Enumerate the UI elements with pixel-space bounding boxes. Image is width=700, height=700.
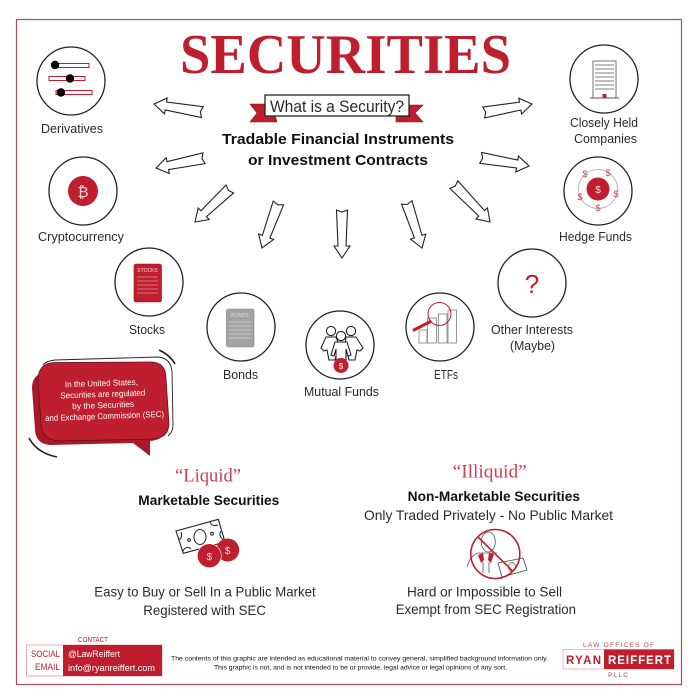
item: ETFs <box>406 293 474 382</box>
icon: cash and coins: $ <box>225 546 231 557</box>
footer: law firm logo: LAW OFFICES OF <box>583 642 654 649</box>
footer: contact box: info@ryanreiffert.com <box>68 663 155 673</box>
footer: disclaimer <box>171 656 548 672</box>
item: bonds: BONDS <box>231 313 250 319</box>
item: cryptocurrency: ₿ <box>77 184 89 201</box>
footer: contact box: EMAIL <box>35 662 60 672</box>
subtitle <box>222 131 454 169</box>
item: other interests <box>491 249 573 353</box>
item: derivatives: Derivatives <box>41 121 103 136</box>
subheading: non-marketable securities: Only Traded Privately - No Public Market <box>364 507 613 523</box>
footer: law firm logo: REIFFERT <box>608 655 671 667</box>
arrow to stocks <box>189 183 235 228</box>
footer: contact box <box>26 635 162 676</box>
text: liquid description <box>94 584 316 618</box>
item: hedge funds: Hedge Funds <box>559 229 632 244</box>
subheading: marketable securities: Marketable Securities <box>138 493 279 508</box>
item: bonds: Bonds <box>223 367 258 382</box>
item: stocks: Stocks <box>129 322 165 337</box>
heading: Illiquid: “Illiquid” <box>453 462 527 483</box>
item: derivatives <box>37 47 105 136</box>
callout: SEC regulation: In the United States, <box>65 377 138 389</box>
item: cryptocurrency <box>38 157 124 244</box>
item: stocks <box>115 248 183 337</box>
callout: SEC regulation: Securities are regulated <box>60 388 146 400</box>
callout: SEC regulation: by the Securities <box>72 399 134 411</box>
item: other interests: ? <box>525 269 539 299</box>
arrow to other interests <box>448 179 496 228</box>
title: SECURITIES <box>180 24 511 86</box>
icon: cash and coins <box>176 519 239 568</box>
text: illiquid description: Hard or Impossible to Sell <box>407 584 562 600</box>
item: hedge funds: $ <box>613 189 619 199</box>
item: mutual funds: Mutual Funds <box>304 384 379 399</box>
footer: law firm logo <box>563 642 674 679</box>
callout: SEC regulation: and Exchange Commission (SEC) <box>45 409 164 423</box>
item: cryptocurrency: Cryptocurrency <box>38 229 124 244</box>
text: liquid description: Easy to Buy or Sell In a Public Market <box>94 584 316 600</box>
item: hedge funds: $ <box>582 169 588 179</box>
footer: disclaimer: The contents of this graphic are intended as educational material to convey general, simplified background information only. <box>171 656 548 662</box>
arrow to bonds <box>254 200 286 251</box>
subheading: non-marketable securities <box>364 489 613 523</box>
footer: law firm logo: RYAN <box>566 655 601 667</box>
item: hedge funds: $ <box>605 168 611 178</box>
arrow to derivatives <box>153 96 204 120</box>
item: closely held companies: Closely Held <box>570 115 638 130</box>
footer: law firm logo: PLLC <box>608 672 628 679</box>
arrow to hedge funds <box>479 150 530 174</box>
text: liquid description: Registered with SEC <box>143 602 266 618</box>
item: other interests: Other Interests <box>491 322 573 337</box>
item: other interests: (Maybe) <box>510 338 555 353</box>
icon: cash and coins: $ <box>207 552 213 563</box>
item: hedge funds: $ <box>595 203 601 213</box>
subtitle: Tradable Financial Instruments <box>222 131 454 148</box>
footer: contact box: @LawReiffert <box>68 649 120 659</box>
item: mutual funds: $ <box>339 362 344 371</box>
arrow to mutual funds <box>334 210 350 258</box>
item: closely held companies <box>570 45 638 146</box>
item: hedge funds <box>559 157 632 244</box>
item: mutual funds <box>304 311 379 399</box>
item: ETFs: ETFs <box>434 367 458 382</box>
heading: Liquid: “Liquid” <box>175 466 241 487</box>
item: closely held companies: Companies <box>574 131 637 146</box>
ribbon heading: What is a Security? <box>250 95 423 122</box>
icon: prohibited private sale <box>467 530 527 578</box>
footer: contact box: SOCIAL <box>31 649 60 659</box>
item: bonds <box>207 293 275 382</box>
item: hedge funds: $ <box>595 185 601 196</box>
arrow to ETFs <box>399 200 430 251</box>
text: illiquid description <box>396 584 576 617</box>
item: stocks: STOCKS <box>137 268 158 274</box>
callout: SEC regulation <box>29 350 175 457</box>
footer: disclaimer: This graphic is not, and is not intended to be or provide, legal advice or legal opinions of any sort. <box>214 664 507 672</box>
subheading: non-marketable securities: Non-Marketable Securities <box>408 489 580 504</box>
arrow to closely held companies <box>482 96 533 120</box>
subtitle: or Investment Contracts <box>248 152 428 169</box>
footer: contact box: CONTACT <box>78 635 108 644</box>
arrow to cryptocurrency <box>154 150 206 176</box>
ribbon heading: What is a Security?: What is a Security? <box>270 98 404 116</box>
item: hedge funds: $ <box>577 192 583 202</box>
text: illiquid description: Exempt from SEC Registration <box>396 601 576 617</box>
